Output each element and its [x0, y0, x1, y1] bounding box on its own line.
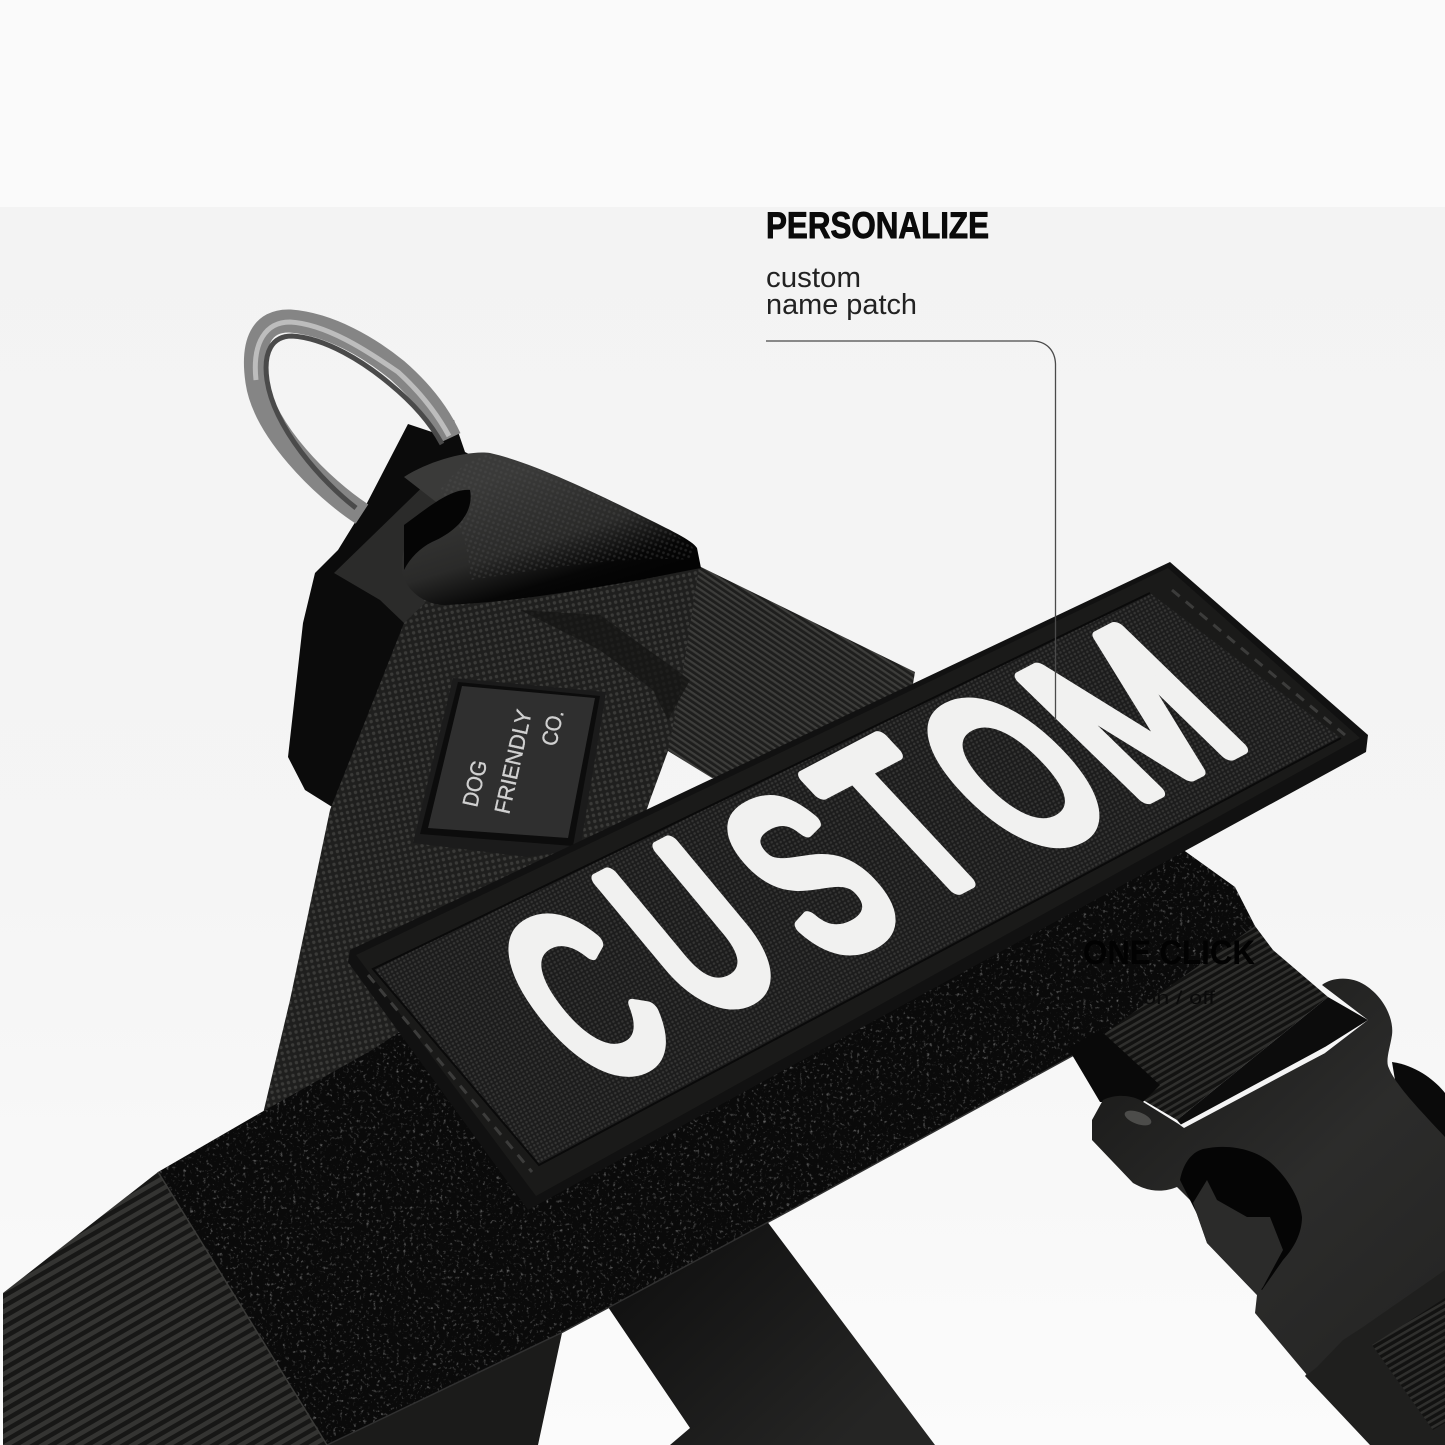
- folded top of harness: [402, 452, 701, 605]
- rubber label: Dog Friendly Co.: FRIENDLY: [489, 707, 537, 816]
- embroidered word CUSTOM: O: [867, 648, 1159, 897]
- rubber label: Dog Friendly Co.: CO.: [536, 708, 569, 748]
- patch fabric: [373, 593, 1341, 1165]
- embroidered word CUSTOM: T: [767, 698, 1038, 944]
- ghost text: ONE CLICK: [1083, 934, 1255, 1008]
- description: custom name patch: [766, 262, 917, 321]
- rubber label: Dog Friendly Co.: [413, 678, 606, 857]
- right neck strap: [655, 565, 915, 778]
- white slit in buckle: [1180, 1047, 1325, 1128]
- buckle highlight: [1123, 1108, 1153, 1128]
- buckle tongue: [1193, 1180, 1283, 1295]
- metal D-ring: [255, 321, 450, 514]
- ghost text: ONE CLICK: snap on / off: [1085, 988, 1216, 1008]
- webbing running into the buckle: [1068, 926, 1328, 1120]
- rubber label: Dog Friendly Co.: DOG: [457, 758, 492, 809]
- name patch: [348, 562, 1368, 1210]
- description: custom name patch: name patch: [766, 289, 917, 321]
- callout leader line to patch: [766, 341, 1056, 720]
- embroidered word CUSTOM: [453, 586, 1288, 1129]
- velcro band: [158, 849, 1255, 1445]
- heading: PERSONALIZE: PERSONALIZE: [766, 205, 989, 246]
- patch border: [348, 562, 1368, 1210]
- lower-left webbing: [3, 1172, 327, 1445]
- lower strap left: [327, 1333, 562, 1445]
- side flap of fold: [334, 470, 470, 623]
- chest strap: [262, 567, 699, 1118]
- black webbing and back padding: [288, 420, 500, 815]
- darker seam fold on strap: [520, 610, 690, 720]
- black edge of webbing: [1068, 1030, 1160, 1102]
- embroidered word CUSTOM: C: [453, 864, 716, 1129]
- buckle body: [1092, 979, 1445, 1375]
- right side hole: [1392, 1062, 1445, 1140]
- plastic buckle: [1092, 979, 1445, 1445]
- photo: black dog harness: [3, 321, 1445, 1445]
- buckle slot: [1177, 997, 1368, 1127]
- lower strap right: [608, 1212, 935, 1445]
- ghost text: ONE CLICK: ONE CLICK: [1083, 934, 1255, 972]
- embroidered word CUSTOM: M: [973, 586, 1288, 839]
- lower webbing: [1372, 1298, 1445, 1430]
- embroidered word CUSTOM: S: [676, 749, 945, 1003]
- lower buckle part: [1305, 1262, 1445, 1445]
- socket shadow: [1180, 1147, 1302, 1290]
- shadow pocket in fold: [404, 490, 471, 570]
- embroidered word CUSTOM: U: [556, 797, 827, 1061]
- description: custom name patch: custom: [766, 262, 861, 294]
